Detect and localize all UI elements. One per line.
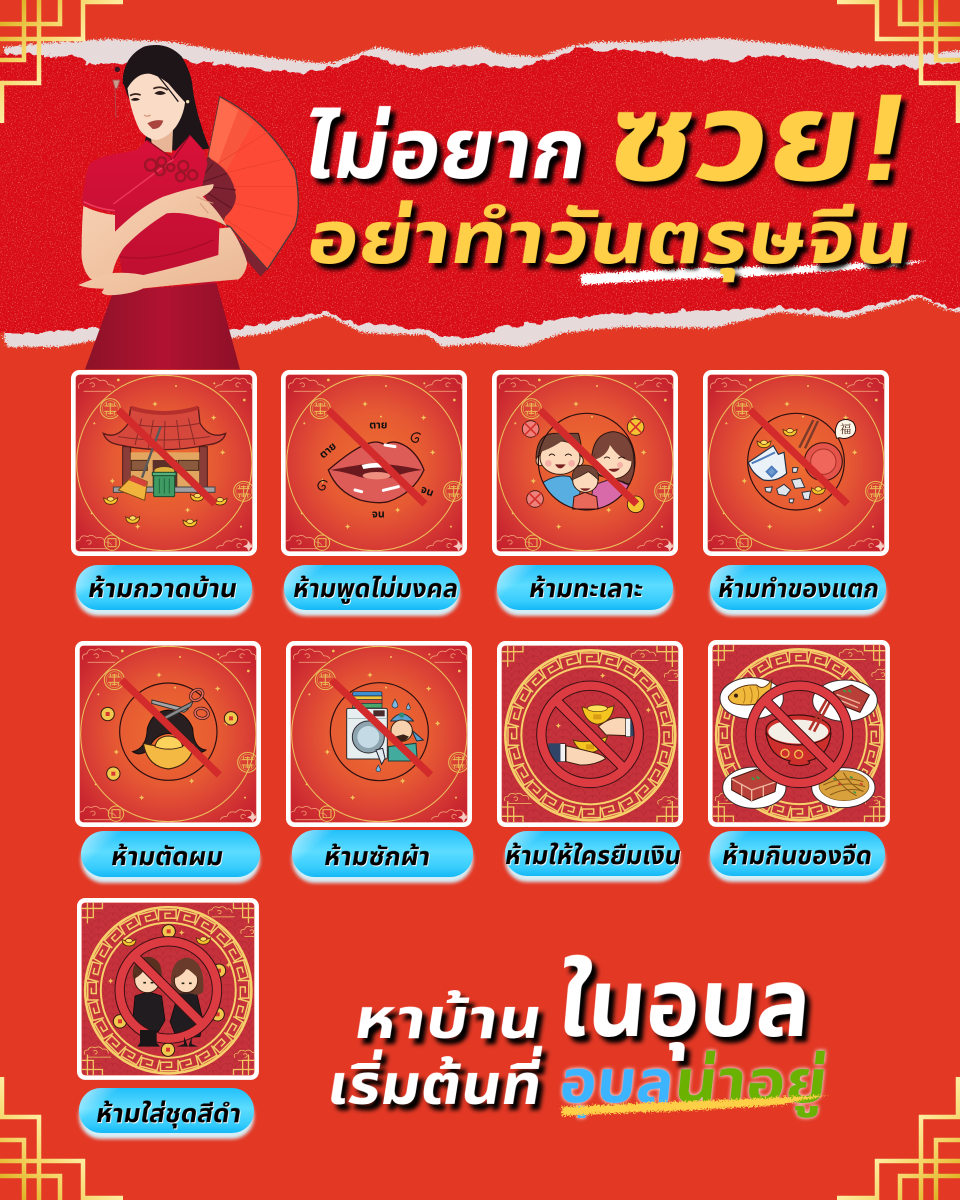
label: no breaking things [710, 565, 886, 616]
card: no laundry [288, 643, 470, 825]
skirt [85, 283, 240, 369]
arms [81, 184, 227, 281]
decorative corner bottom right [837, 1077, 960, 1200]
card: no breaking things [705, 372, 887, 554]
decorative corner top right [837, 0, 960, 123]
torn paper banner [0, 38, 960, 347]
footer brand: Ubon Na-yu: น่าอยู่ [671, 1048, 831, 1118]
label: no plain food [710, 831, 885, 882]
card: no breaking things: 福 [840, 421, 851, 437]
dress bodice [82, 135, 221, 285]
label: no haircut [81, 831, 260, 883]
footer slogan: find a home: หาบ้าน [350, 987, 547, 1050]
frog knots [145, 157, 197, 181]
title line 2 yellow: อย่าทำวันตรุษจีน [301, 196, 919, 283]
label: no sweeping [76, 565, 252, 616]
label: no sweeping: ห้ามกวาดบ้าน [86, 575, 239, 603]
footer brand: Ubon Na-yu [556, 1048, 831, 1118]
card: no inauspicious speech: จน [419, 484, 435, 500]
label: no plain food: ห้ามกินของจืด [720, 842, 874, 870]
label: no lending money: ห้ามให้ใครยืมเงิน [503, 842, 683, 870]
decorative corner top left [0, 0, 123, 123]
label: no breaking things: ห้ามทำของแตก [716, 575, 881, 603]
label: no inauspicious speech [284, 565, 460, 616]
card: no lending money [499, 643, 692, 825]
card: no inauspicious speech: ตาย [369, 419, 387, 431]
woman in red cheongsam holding a fan [78, 45, 298, 369]
card: no black clothes [79, 900, 267, 1078]
title brush underline [580, 261, 926, 285]
label: no black clothes [79, 1088, 254, 1139]
card: no haircut [77, 643, 259, 825]
label: no black clothes: ห้ามใส่ชุดสีดำ [94, 1100, 243, 1129]
title line 1 yellow: ซวย! [598, 69, 920, 207]
title line 1 white: ไม่อยาก [297, 101, 594, 196]
card: no inauspicious speech: ตาย [317, 440, 339, 461]
card: no inauspicious speech [283, 372, 465, 554]
card: no plain food [710, 642, 898, 825]
label: no quarrelling: ห้ามทะเลาะ [527, 575, 645, 603]
decorative corner bottom left [0, 1077, 123, 1200]
label: no lending money [503, 831, 683, 882]
card: no sweeping [73, 372, 255, 554]
card: no inauspicious speech: จน [372, 508, 385, 520]
card: no quarrelling [494, 372, 676, 554]
fan leaf [208, 97, 298, 269]
footer slogan: starts at: เริ่มต้นที่ [323, 1045, 548, 1116]
label: no inauspicious speech: ห้ามพูดไม่มงคล [291, 575, 460, 604]
label: no laundry [292, 830, 473, 883]
footer brand: Ubon Na-yu: อุบล [556, 1048, 678, 1118]
footer slogan: in Ubon: ในอุบล [554, 950, 816, 1061]
label: no haircut: ห้ามตัดผม [109, 843, 225, 871]
label: no laundry: ห้ามซักผ้า [322, 843, 432, 871]
label: no quarrelling [497, 565, 673, 616]
